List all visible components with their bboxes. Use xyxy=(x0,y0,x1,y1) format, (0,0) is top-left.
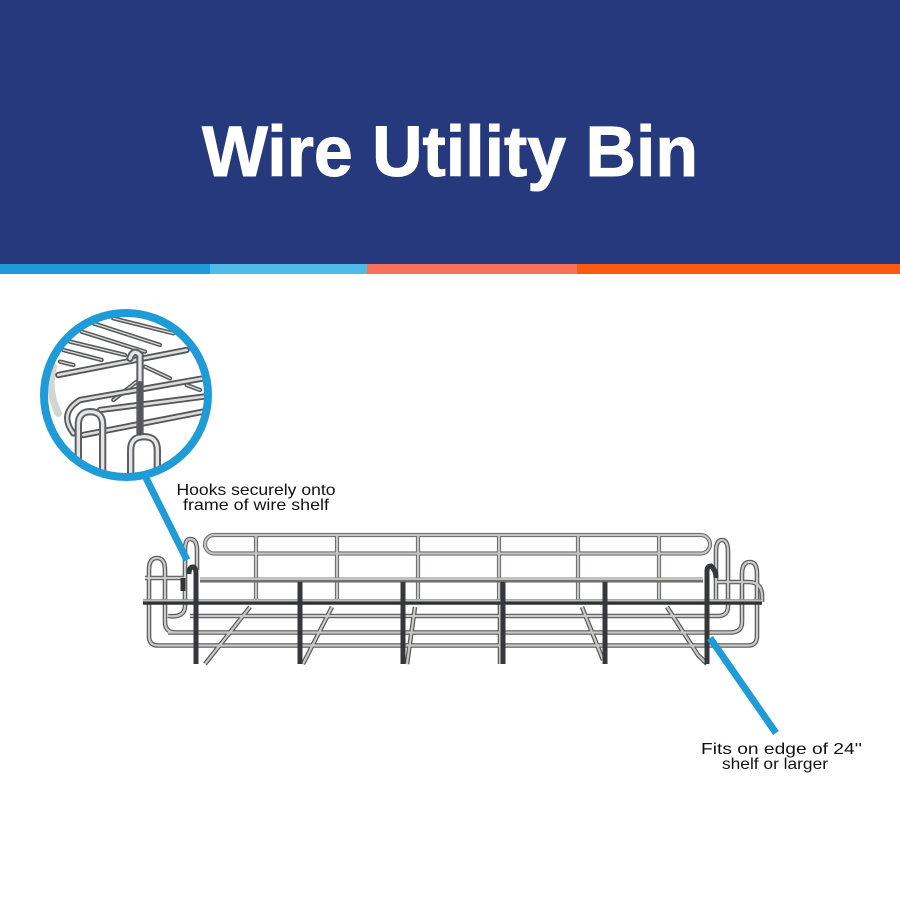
header banner xyxy=(0,0,900,264)
colour stripe xyxy=(0,264,900,274)
leader line to hook detail xyxy=(146,478,187,560)
callout: hooks onto shelf frame xyxy=(176,482,336,514)
callout: fits on shelf edge: shelf or larger xyxy=(722,756,829,773)
title: Wire Utility Bin xyxy=(202,113,698,192)
callout: hooks onto shelf frame: Hooks securely onto xyxy=(176,482,336,499)
callout: fits on shelf edge: Fits on edge of 24'' xyxy=(701,741,862,758)
wire utility bin product illustration xyxy=(143,535,762,664)
callout: fits on shelf edge xyxy=(701,741,862,773)
detail magnifier: hook close-up xyxy=(44,313,208,477)
callout: hooks onto shelf frame: frame of wire shelf xyxy=(183,497,330,514)
leader line to shelf edge xyxy=(710,638,776,733)
